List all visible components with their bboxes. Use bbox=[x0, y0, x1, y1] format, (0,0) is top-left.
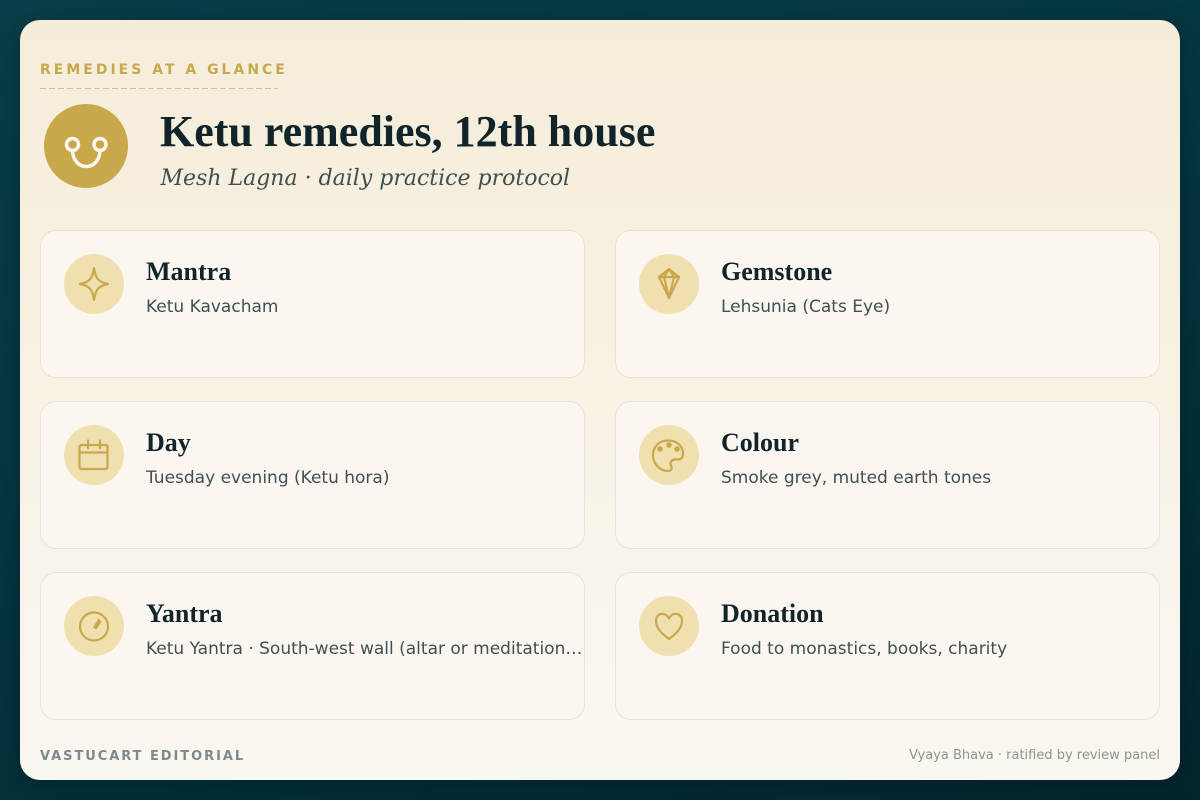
panel: colour bbox=[615, 401, 1160, 549]
icon: four-point star bbox=[64, 254, 124, 314]
subtitle: Mesh Lagna · daily practice protocol bbox=[160, 166, 570, 191]
text: donation: Food to monastics, books, charity bbox=[721, 639, 1007, 659]
text: day: Tuesday evening (Ketu hora) bbox=[146, 468, 389, 488]
heading: gemstone: Gemstone bbox=[721, 257, 832, 286]
footer brand: VASTUCART EDITORIAL bbox=[40, 749, 245, 764]
icon: palette bbox=[639, 425, 699, 485]
text: gemstone: Lehsunia (Cats Eye) bbox=[721, 297, 890, 317]
icon: header emblem bbox=[44, 104, 128, 188]
dashed rule bbox=[40, 88, 278, 89]
heading: colour: Colour bbox=[721, 428, 799, 457]
text: colour: Smoke grey, muted earth tones bbox=[721, 468, 991, 488]
text: yantra: Ketu Yantra · South-west wall (altar or meditation… bbox=[146, 639, 582, 659]
text: mantra: Ketu Kavacham bbox=[146, 297, 278, 317]
icon: heart bbox=[639, 596, 699, 656]
heading: yantra: Yantra bbox=[146, 599, 223, 628]
heading: day: Day bbox=[146, 428, 191, 457]
panel: mantra bbox=[40, 230, 585, 378]
eyebrow label: REMEDIES AT A GLANCE bbox=[40, 62, 288, 78]
icon: compass bbox=[64, 596, 124, 656]
panel: gemstone bbox=[615, 230, 1160, 378]
title: Ketu remedies, 12th house bbox=[160, 107, 655, 156]
icon: calendar bbox=[64, 425, 124, 485]
panel: donation bbox=[615, 572, 1160, 720]
heading: donation: Donation bbox=[721, 599, 824, 628]
footer note: Vyaya Bhava · ratified by review panel bbox=[909, 748, 1160, 763]
panel: day bbox=[40, 401, 585, 549]
panel: yantra bbox=[40, 572, 585, 720]
icon: gemstone bbox=[639, 254, 699, 314]
heading: mantra: Mantra bbox=[146, 257, 231, 286]
